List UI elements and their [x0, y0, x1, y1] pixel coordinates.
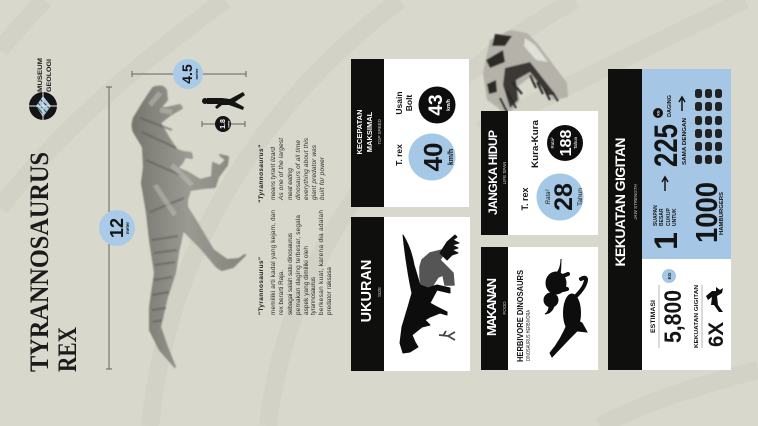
text block: English description: giant predator was [311, 144, 318, 200]
text block: Indonesian description: pemakan daging terbesar, segala [295, 215, 302, 315]
stat: 225 kg meat: KG [656, 110, 660, 116]
skull illustration [483, 30, 568, 117]
silhouette: small horned dinosaur [440, 235, 459, 260]
panel heading: life span: JANGKA HIDUP [486, 130, 500, 215]
logo: Museum Geologi: GEOLOGI [46, 59, 53, 92]
text block: English description [258, 137, 326, 203]
stat: one bite: 1 [648, 232, 684, 250]
illustration: t-rex [132, 87, 245, 367]
logo: Museum Geologi: MUSEUM [37, 58, 44, 92]
panel heading: size: SIZE [377, 287, 382, 297]
stat: 1000 hamburgers: HAMBURGERS [719, 191, 725, 235]
measure: height 4.5 meter: meter [194, 68, 199, 79]
stat: T. rex 40 km/h: T. rex [394, 144, 404, 166]
text block: Indonesian description: sebagai salah satu dinosaurus [287, 233, 294, 315]
text block: Indonesian description: memiliki arti kadal yang kejam, dan [270, 210, 277, 315]
text block: English description: dinosaurs of all time [295, 140, 302, 200]
stat: 225 kg meat: 225 [648, 124, 684, 167]
stat: one bite: CUKUP [666, 208, 672, 226]
panel heading: jaw strength: KEKUATAN GIGITAN [612, 138, 628, 266]
measure: human 1.8 meter [202, 116, 245, 132]
text block: Indonesian description: "Tyrannosaurus" [258, 257, 265, 315]
panel: top speed [351, 59, 469, 207]
stat: T. rex 40 km/h: 40 [418, 143, 448, 171]
label: same as: SAMA DENGAN [682, 118, 688, 165]
text block: Indonesian description: berkesan kuat, karena dia adalah [318, 210, 325, 315]
icon: human silhouette [202, 92, 245, 110]
stat: turtle 188 years: Tahun [573, 136, 578, 149]
panel heading: life span [486, 130, 507, 215]
panel heading: food: MAKANAN [484, 278, 499, 336]
title [25, 152, 82, 372]
stat: Usain Bolt 43 km/h: 43 [426, 94, 447, 116]
silhouette: human [439, 331, 455, 340]
silhouette: ceratopsian [544, 259, 568, 314]
stat: 1000 hamburgers: 1000 [689, 182, 724, 243]
text block: English description: "Tyrannosaurus" [258, 144, 265, 203]
text block: English description: means tyrant lizard [270, 147, 277, 200]
stat: one bite: SUAPAN [653, 205, 659, 226]
silhouette: sauropod [550, 278, 587, 357]
panel heading: jaw strength [612, 138, 638, 266]
panel heading: food [484, 278, 507, 336]
silhouette: gray dinosaur [420, 250, 454, 293]
stat: turtle 188 years: Kura-Kura [530, 119, 541, 168]
text block: Indonesian description [258, 210, 333, 315]
title: TYRANNOSAURUS [25, 152, 54, 372]
icon: grid of hamburgers [695, 89, 722, 164]
text block: Indonesian description: predator raksasa [326, 267, 333, 315]
measure: height 4.5 meter [132, 59, 246, 89]
stat: T. rex 28 years: T. rex [520, 187, 530, 211]
text block: English description: built for power [319, 156, 326, 200]
food label: DINOSAURUS HERBIVORA [526, 309, 532, 361]
text block: Indonesian description: tyrannosaurus [310, 277, 317, 315]
panel heading: food: FOOD [502, 301, 507, 314]
text block: Indonesian description: rex berarti Raja. [278, 270, 285, 315]
stat: T. rex 40 km/h: km/h [448, 149, 455, 165]
stat: 225 kg meat: DAGING [667, 95, 673, 117]
panel: food [481, 247, 598, 370]
measure: height 4.5 meter: 4.5 [179, 64, 195, 84]
stat: T. rex 40 km/h [394, 134, 456, 180]
text block: English description: everything about this [303, 137, 310, 200]
stat: estimate 5,800 kg: ESTIMASI [650, 300, 657, 333]
panel heading: speed: MAKSIMAL [365, 111, 374, 152]
stat: T. rex 28 years [520, 174, 584, 220]
food label: HERBIVORE DINOSAURS [516, 269, 525, 362]
stat: Usain Bolt 43 km/h: Usain [394, 91, 404, 115]
measure: length 12 meter: 12 [107, 218, 127, 238]
text block: English description: meat eating [287, 168, 294, 200]
stat: T. rex 28 years: Tahun [577, 188, 584, 206]
stat: T. rex 28 years: Rata² [546, 189, 552, 204]
panel heading: size [359, 260, 382, 322]
logo: Museum Geologi [28, 58, 58, 121]
stat: Usain Bolt 43 km/h: Bolt [404, 95, 414, 111]
stat: bite force 6x: KEKUATAN GIGITAN [694, 285, 700, 348]
panel: life span [481, 111, 598, 235]
panel heading: life span: LIFE SPAN [502, 162, 507, 184]
panel: size [351, 217, 470, 371]
stat: turtle 188 years: Rata² [550, 137, 555, 149]
silhouette: t-rex [400, 235, 450, 353]
arrow [662, 177, 668, 191]
panel heading: speed: TOP SPEED [377, 118, 382, 145]
stat: turtle 188 years: 188 [558, 130, 575, 156]
stat: estimate 5,800 kg [650, 269, 687, 348]
measure: length 12 meter [99, 87, 135, 369]
stat: bite force 6x [694, 285, 728, 348]
measure: human 1.8 meter: 1.8 [220, 119, 227, 129]
measure: length 12 meter: meter [125, 222, 130, 234]
title: REX [53, 327, 82, 372]
stat: one bite: BESAR [659, 208, 665, 226]
measure: human 1.8 meter: meter [226, 120, 230, 128]
panel heading: speed [355, 110, 382, 154]
icon: lion silhouette [706, 287, 723, 312]
stat: estimate 5,800 kg: KG [667, 272, 672, 279]
text block: English description: As one of the largest [278, 138, 285, 201]
stat: one bite [648, 205, 684, 250]
stat: T. rex 28 years: 28 [550, 183, 578, 211]
text block: Indonesian description: aspek yang dimiliki oleh [303, 246, 310, 315]
food label [516, 269, 532, 362]
panel heading: jaw strength: JAW STRENGTH [633, 184, 638, 221]
stat: Usain Bolt 43 km/h [394, 86, 456, 124]
arrow [679, 97, 685, 111]
stat: turtle 188 years [530, 119, 583, 168]
stat: bite force 6x: 6X [705, 322, 728, 347]
stat: Usain Bolt 43 km/h: km/h [446, 99, 452, 111]
panel heading: size: UKURAN [359, 260, 375, 322]
panel: jaw strength [608, 69, 731, 370]
stat: one bite: UNTUK [672, 208, 678, 226]
stat: estimate 5,800 kg: 5,800 [660, 290, 687, 343]
panel heading: speed: KECEPATAN [355, 110, 364, 154]
